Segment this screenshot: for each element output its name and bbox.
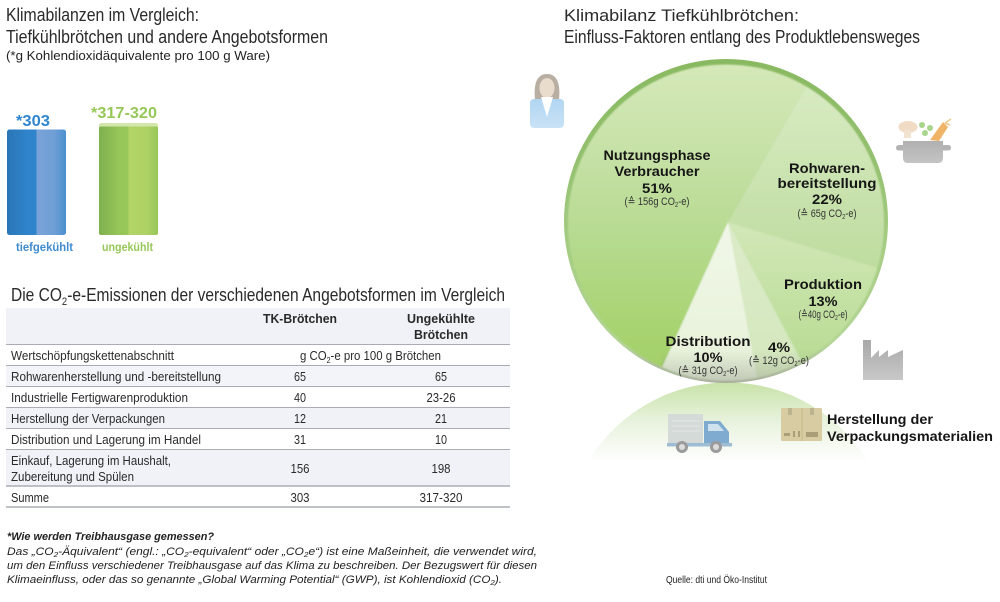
label: Rohwarenbereitstellung: Rohwaren-	[789, 160, 865, 176]
slice: Distribution 10%	[662, 222, 758, 381]
table: emissions by value chain stage: Brötchen	[414, 327, 468, 342]
table: emissions by value chain stage	[6, 308, 510, 507]
bar: tiefgekühlt	[7, 113, 73, 254]
table: emissions by value chain stage: 303	[290, 490, 310, 505]
label: Rohwarenbereitstellung: bereitstellung	[778, 175, 876, 191]
table: emissions by value chain stage: 65	[294, 369, 306, 384]
table: emissions by value chain stage: 156	[290, 461, 310, 476]
label: Produktion: 13%	[808, 293, 838, 309]
table: emissions by value chain stage: g CO	[300, 348, 330, 363]
icon: cooking pot with vegetables	[896, 119, 951, 163]
label: Distribution: 2	[723, 371, 726, 378]
label: packaging materials	[827, 411, 993, 444]
label: 4 percent packaging: -e)	[798, 355, 809, 367]
heading: right chart title: Klimabilanz Tiefkühlbrötchen:	[564, 6, 799, 25]
footnote: greenhouse gas measurement: 2	[489, 578, 496, 587]
label: Nutzungsphase: Nutzungsphase	[604, 147, 711, 163]
label: Nutzungsphase: 2	[675, 202, 678, 209]
footnote: greenhouse gas measurement: *Wie werden Treibhausgase gemessen?	[7, 531, 214, 543]
table: emissions by value chain stage: Herstellung der Verpackungen	[11, 411, 165, 426]
bar: tiefgekühlt: tiefgekühlt	[16, 240, 73, 254]
bar: ungekühlt	[91, 105, 158, 254]
table: emissions by value chain stage: Distribution und Lagerung im Handel	[11, 432, 201, 447]
label: Rohwarenbereitstellung	[778, 160, 876, 221]
icon: factory	[863, 340, 903, 380]
footnote: greenhouse gas measurement	[7, 531, 537, 587]
table: emissions by value chain stage: Ungekühlte	[407, 311, 475, 326]
icon: delivery truck	[667, 414, 732, 453]
table: emissions by value chain stage: 40	[294, 390, 306, 405]
table: emissions by value chain stage: Rohwarenherstellung und -bereitstellung	[11, 369, 221, 384]
table: emissions by value chain stage: Industrielle Fertigwarenproduktion	[11, 390, 188, 405]
label: Produktion: -e)	[838, 309, 848, 321]
label: Distribution: Distribution	[666, 333, 750, 349]
table: emissions by value chain stage: 31	[294, 432, 306, 447]
label: Nutzungsphase: 51%	[642, 180, 673, 196]
footnote: greenhouse gas measurement: Das „CO	[7, 546, 50, 558]
table: emissions by value chain stage: 23-26	[426, 390, 456, 405]
bar chart: comparison of footprints	[7, 105, 158, 254]
reflection of the pie chart	[588, 382, 868, 462]
table: emissions by value chain stage: 21	[435, 411, 447, 426]
bar: ungekühlt: ungekühlt	[102, 240, 153, 254]
table: emissions by value chain stage: 65	[435, 369, 447, 384]
table: emissions by value chain stage: Wertschöpfungskettenabschnitt	[11, 348, 174, 363]
table heading: Die CO	[11, 285, 70, 305]
table: emissions by value chain stage: 198	[432, 461, 450, 476]
label: 4 percent packaging: 4%	[768, 339, 791, 355]
label: Nutzungsphase: -e)	[678, 196, 690, 208]
slice: Produktion 13%	[728, 222, 878, 360]
footnote: greenhouse gas measurement: Klimaeinfluss, oder das so genannte „Global Warming Potential“ (GWP), ist Kohlendioxid (CO	[7, 574, 462, 586]
label: 4 percent packaging	[749, 339, 809, 368]
footnote: greenhouse gas measurement: 2	[53, 550, 59, 559]
footnote: greenhouse gas measurement: e“) ist eine Maßeinheit, die verwendet wird,	[308, 546, 537, 558]
heading: left chart title: Klimabilanzen im Vergleich:	[6, 5, 199, 25]
label: Nutzungsphase	[604, 147, 711, 209]
label: Rohwarenbereitstellung: (≙ 65g CO	[798, 208, 851, 220]
slice: Rohwarenbereitstellung 22%	[728, 86, 884, 268]
table: emissions by value chain stage: Einkauf, Lagerung im Haushalt,	[11, 453, 171, 468]
label: Nutzungsphase: (≙ 156g CO	[624, 196, 684, 208]
heading: left chart title: (*g Kohlendioxidäquivalente pro 100 g Ware)	[6, 49, 270, 63]
table: emissions by value chain stage: 12	[294, 411, 306, 426]
table: emissions by value chain stage: TK-Brötchen	[263, 311, 337, 326]
bar: tiefgekühlt: *303	[16, 113, 50, 130]
label: Rohwarenbereitstellung: 2	[842, 214, 845, 221]
pie chart: life cycle shares	[564, 59, 888, 383]
table: emissions by value chain stage: -e pro 100 g Brötchen	[331, 348, 441, 363]
table: emissions by value chain stage: 10	[435, 432, 447, 447]
label: Nutzungsphase: Verbraucher	[614, 163, 700, 179]
label: Produktion: 2	[835, 315, 838, 322]
footnote: greenhouse gas measurement: ).	[493, 574, 502, 586]
table heading: -e-Emissionen der verschiedenen Angebotsformen im Vergleich	[67, 285, 505, 305]
label: Produktion: (≙40g CO	[798, 309, 849, 321]
footnote: greenhouse gas measurement: 2	[303, 550, 309, 559]
heading: left chart title	[6, 5, 328, 63]
table: emissions by value chain stage: Summe	[11, 490, 49, 505]
label: packaging materials: Herstellung der	[827, 411, 934, 427]
heading: left chart title: Tiefkühlbrötchen und andere Angebotsformen	[6, 27, 328, 47]
label: Rohwarenbereitstellung: 22%	[812, 191, 843, 207]
icon: cardboard box	[781, 408, 822, 441]
heading: right chart title	[564, 6, 920, 47]
label: 4 percent packaging: 2	[794, 361, 798, 368]
slice: Verpackung 4%	[728, 223, 801, 378]
label: Distribution: (≙ 31g CO	[678, 365, 732, 377]
table: emissions by value chain stage: 317-320	[420, 490, 462, 505]
label: packaging materials: Verpackungsmaterialien	[827, 428, 993, 444]
label: Distribution: 10%	[694, 349, 723, 365]
label: Distribution: -e)	[726, 365, 738, 377]
footnote: greenhouse gas measurement: um den Einfluss verschiedener Treibhausgase auf das Klima zu beschreiben. Der Bezugswert für diesen	[7, 560, 537, 572]
bar: ungekühlt: *317-320	[91, 105, 157, 122]
label: 4 percent packaging: (≙ 12g CO	[749, 355, 803, 367]
label: Distribution	[666, 333, 750, 378]
label: Produktion	[784, 276, 862, 322]
icon: consumer	[530, 74, 564, 128]
source note: Quelle: dti und Öko-Institut	[666, 574, 767, 586]
label: Rohwarenbereitstellung: -e)	[845, 208, 856, 220]
footnote: greenhouse gas measurement: -equivalent“ oder „CO	[189, 546, 304, 558]
footnote: greenhouse gas measurement: 2	[183, 550, 190, 559]
heading: right chart title: Einfluss-Faktoren entlang des Produktlebensweges	[564, 27, 920, 47]
slice: Nutzungsphase 51%	[568, 64, 806, 367]
table: emissions by value chain stage: Zubereitung und Spülen	[11, 469, 134, 484]
label: Produktion: Produktion	[784, 276, 862, 292]
table: emissions by value chain stage: 2	[327, 356, 331, 365]
table heading: 2	[62, 296, 67, 308]
footnote: greenhouse gas measurement: -Äquivalent“ (engl.: „CO	[58, 546, 185, 558]
